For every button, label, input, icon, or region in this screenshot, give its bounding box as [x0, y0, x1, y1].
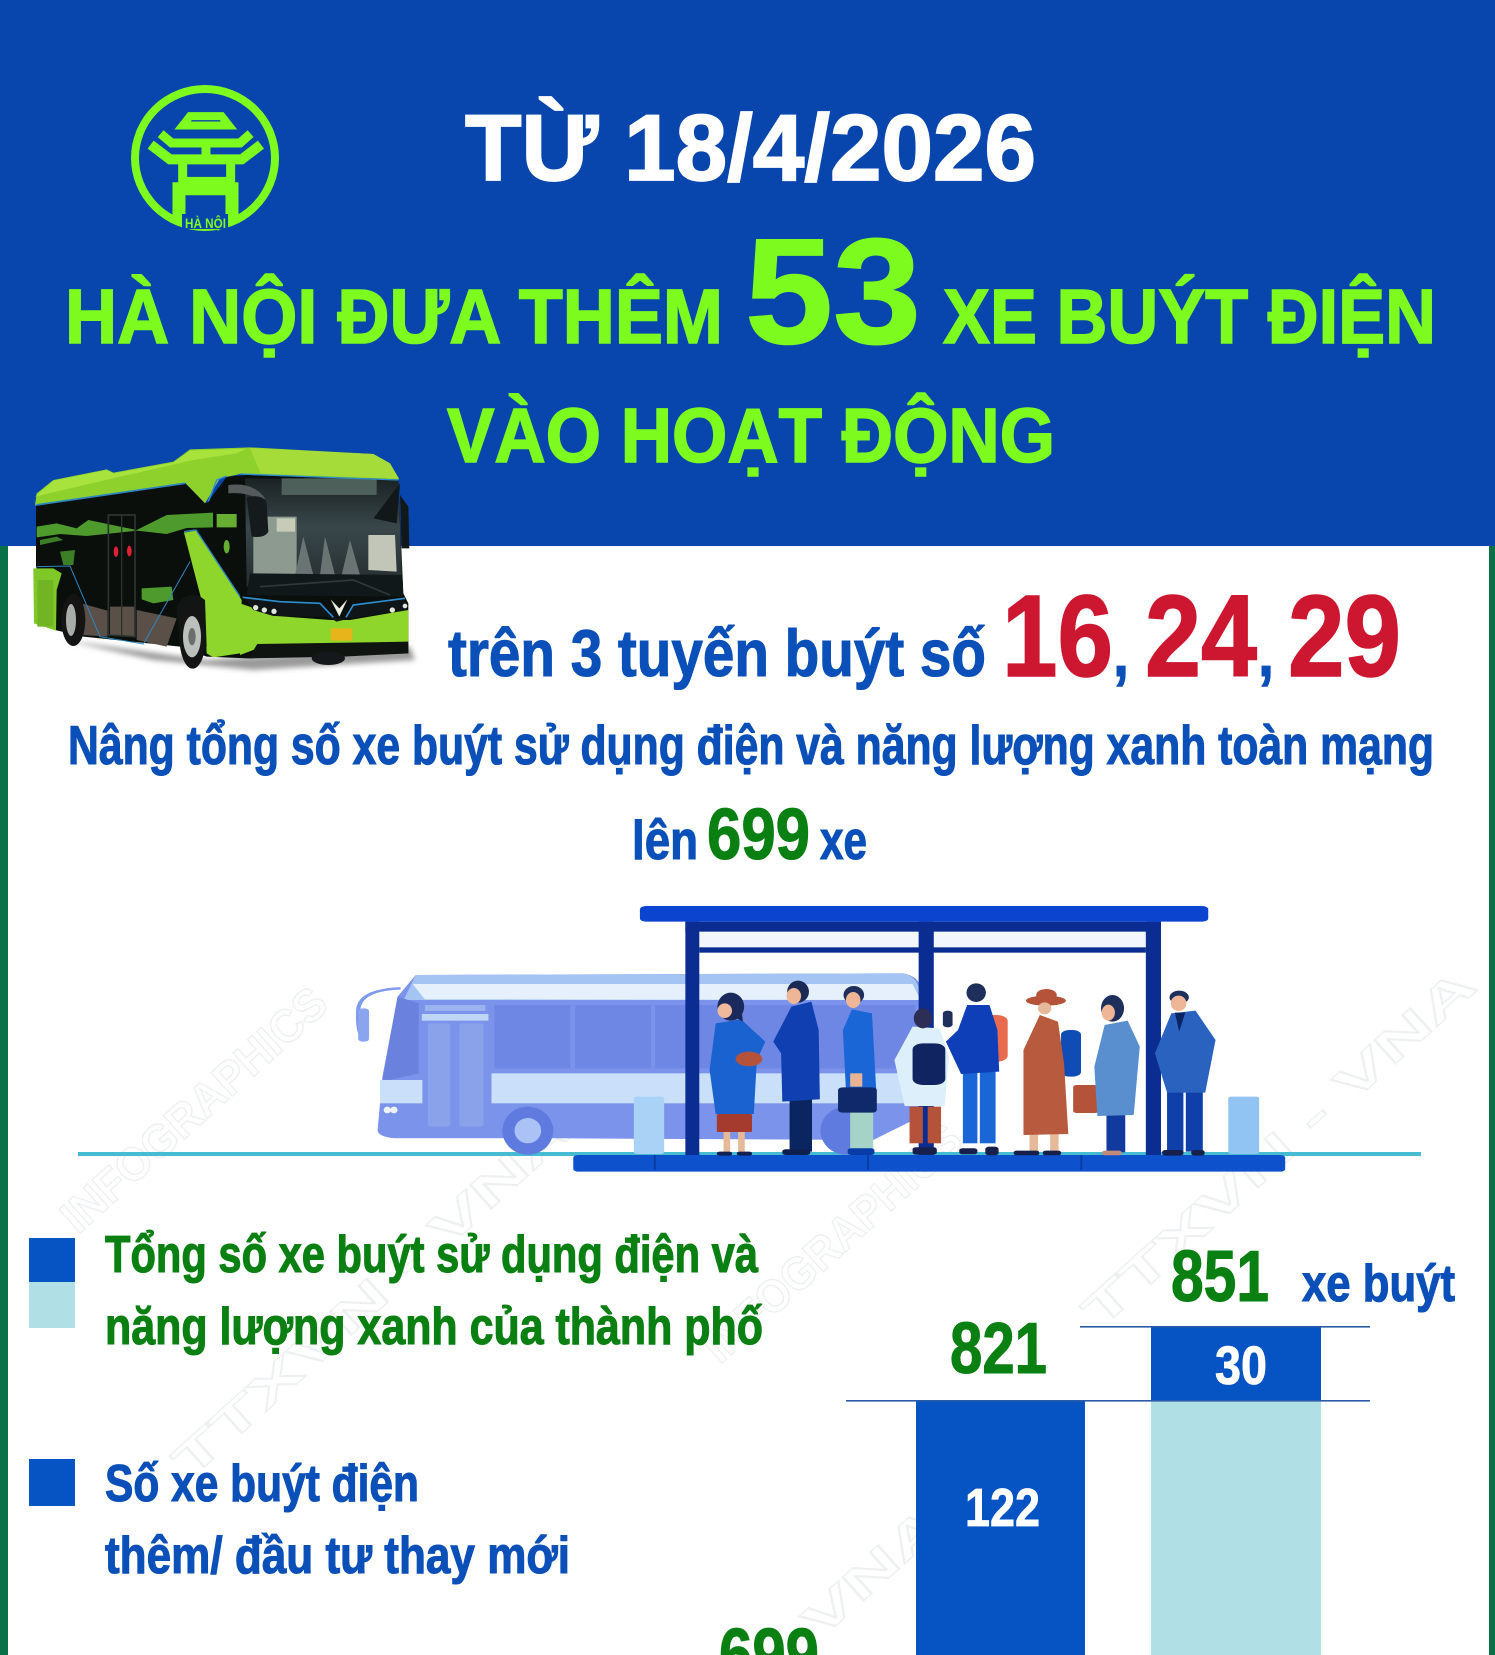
legend swatch: added buses	[29, 1459, 75, 1506]
road line	[78, 1152, 1421, 1156]
title: main line: HÀ NỘI ĐƯA THÊM	[65, 273, 723, 360]
title: main line	[65, 207, 1436, 375]
person 1	[710, 993, 765, 1156]
title: main line: XE BUÝT ĐIỆN	[943, 273, 1436, 360]
person 8	[1155, 991, 1216, 1156]
text: routes line: trên 3 tuyến buýt số	[448, 616, 986, 690]
value: 851: 851	[1171, 1237, 1269, 1317]
shelter floor	[573, 1155, 1285, 1172]
header band	[0, 0, 1495, 546]
watermarks: TTXVN - VNA	[1072, 958, 1486, 1337]
bar 2: 30 added	[1151, 1327, 1321, 1401]
shelter frame	[685, 922, 1161, 1157]
title: date: TỪ 18/4/2026	[465, 95, 1036, 200]
bollard right	[1228, 1097, 1259, 1154]
text: routes line: ,	[1113, 616, 1129, 690]
watermarks: INFOGRAPHICS	[50, 976, 337, 1242]
text: routes line	[448, 571, 1401, 701]
text: 699 buses line	[632, 795, 867, 875]
icon: Hanoi logo: HÀ NỘI	[185, 214, 226, 231]
watermarks: INFOGRAPHICS	[692, 1113, 972, 1372]
illustration: bus stop	[358, 906, 1285, 1172]
legend text: total buses: Tổng số xe buýt sử dụng điện và	[105, 1226, 759, 1284]
legend text: total buses: năng lượng xanh của thành phố	[105, 1298, 763, 1356]
text: routes line: 24	[1145, 571, 1257, 701]
unit: xe buyt: xe buýt	[1302, 1255, 1455, 1313]
text: routes line: 29	[1288, 571, 1401, 701]
person 6	[1014, 989, 1081, 1155]
text: 699 buses line: xe	[820, 809, 867, 871]
text: routes line: 16	[1002, 571, 1113, 701]
background bus	[358, 973, 920, 1155]
watermarks	[50, 958, 1486, 1647]
person 2	[773, 981, 820, 1155]
person 4	[894, 1008, 949, 1155]
person 5	[943, 983, 1008, 1155]
text: 699 buses line: 699	[707, 795, 810, 875]
legend text: added buses: Số xe buýt điện	[105, 1455, 419, 1513]
bar 1: 122 added	[916, 1401, 1085, 1655]
shelter roof	[640, 906, 1208, 922]
title: main line: 53	[745, 207, 921, 375]
photo: electric bus	[33, 447, 415, 670]
icon: Hanoi logo	[135, 89, 275, 231]
shelter upper panels	[699, 932, 1146, 947]
value: 122: 122	[965, 1478, 1040, 1538]
watermarks: TTXVN - VNA	[162, 1101, 583, 1487]
text: 699 buses line: lên	[632, 809, 698, 871]
bollard left	[634, 1097, 664, 1154]
person 7	[1073, 995, 1140, 1155]
legend text: added buses: thêm/ đầu tư thay mới	[105, 1527, 570, 1585]
watermarks: VNA	[792, 1495, 953, 1647]
bar 2: total base	[1151, 1401, 1321, 1655]
title: second line: VÀO HOẠT ĐỘNG	[447, 392, 1055, 479]
legend text: added buses	[105, 1455, 570, 1585]
value: 30: 30	[1215, 1336, 1267, 1396]
value: 821: 821	[950, 1309, 1047, 1389]
legend text: total buses	[105, 1226, 763, 1356]
text: routes line: ,	[1258, 616, 1274, 690]
person 3	[838, 986, 877, 1155]
legend swatch: total buses	[29, 1238, 75, 1328]
bar chart	[719, 1237, 1455, 1655]
